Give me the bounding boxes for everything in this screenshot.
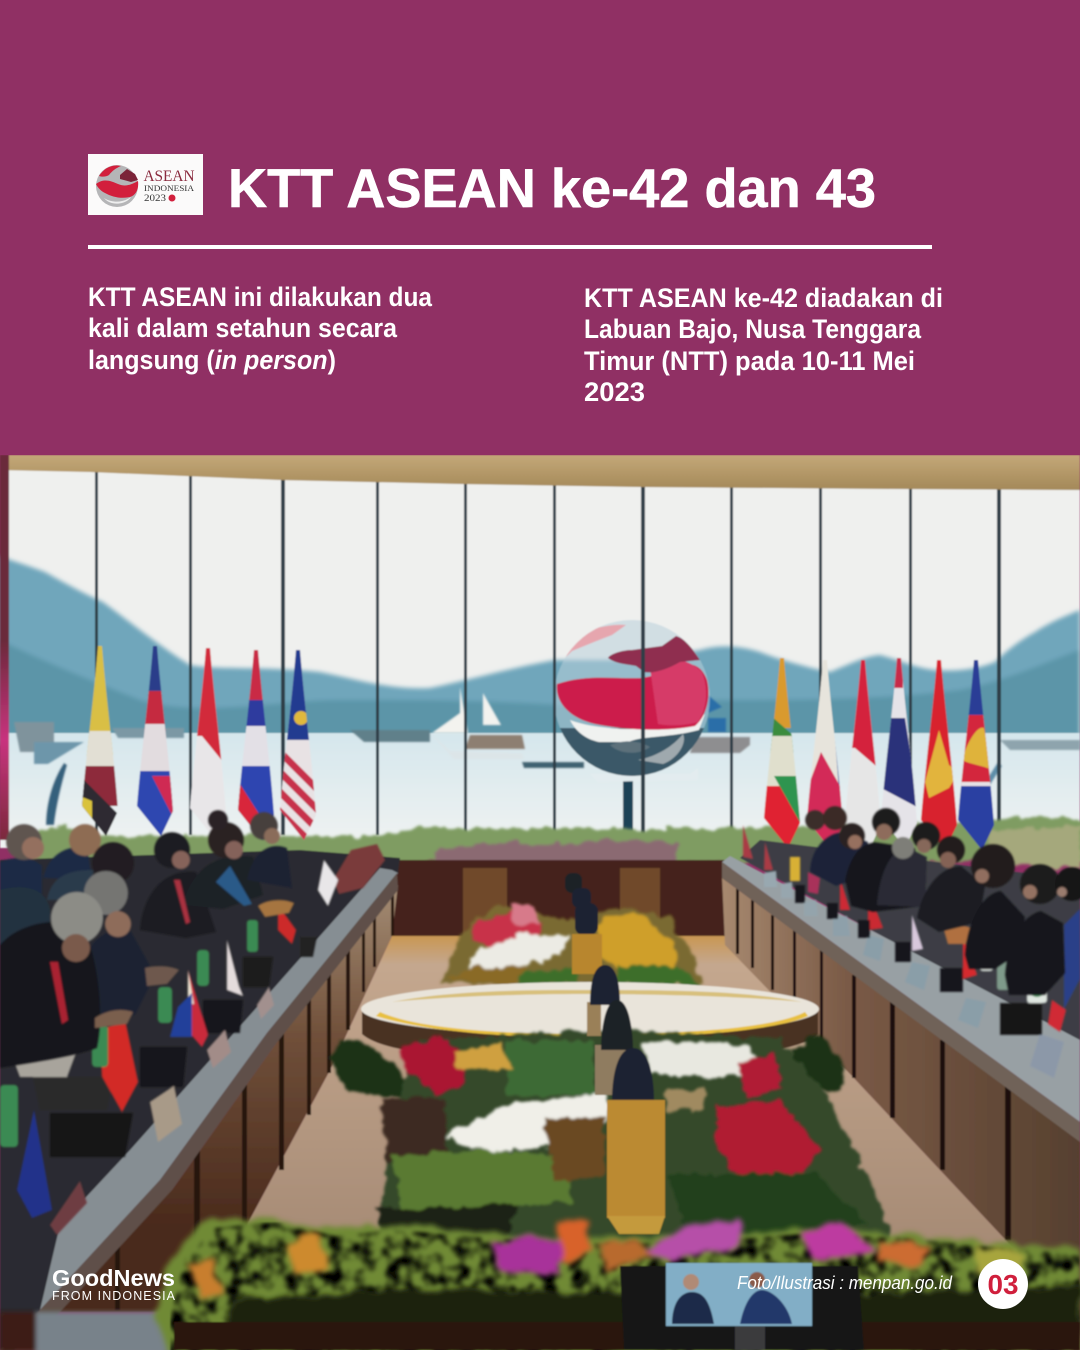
sea xyxy=(0,733,1080,848)
flag: Singapore xyxy=(846,659,879,846)
boats on water xyxy=(14,687,1080,825)
foreground flowers xyxy=(155,1216,1080,1350)
brand: GoodNews From Indonesia: GoodNews xyxy=(52,1265,175,1291)
flag: Thailand xyxy=(882,657,918,840)
left table wood panels xyxy=(40,885,398,1312)
title divider xyxy=(88,245,932,249)
wooden floor xyxy=(0,936,1080,1350)
text block: right column: 2023 xyxy=(584,377,645,407)
side plants xyxy=(330,1032,844,1098)
brand: GoodNews From Indonesia: FROM INDONESIA xyxy=(52,1289,176,1303)
text block: right column xyxy=(584,283,943,407)
delegates: left side xyxy=(0,810,294,1068)
flag: Brunei xyxy=(80,646,120,841)
center flower arrangement: front xyxy=(377,1030,889,1258)
brand: GoodNews From Indonesia xyxy=(52,1265,176,1303)
center flower arrangement: back xyxy=(440,905,702,985)
logo: ASEAN Indonesia 2023: ASEAN xyxy=(144,168,195,185)
page number badge: 03 xyxy=(988,1269,1018,1300)
back greenery xyxy=(30,818,1080,868)
table items: left xyxy=(0,844,385,1235)
page number badge xyxy=(978,1259,1028,1309)
right table surface xyxy=(722,840,1080,1142)
photo: summit meeting room xyxy=(0,455,1080,1350)
bottom edge xyxy=(174,1322,1080,1350)
text block: left column: KTT ASEAN ini dilakukan dua xyxy=(88,282,433,312)
text block: left column xyxy=(88,282,433,375)
table items: right xyxy=(743,825,1080,1078)
window mullions xyxy=(95,455,1001,835)
logo: ASEAN Indonesia 2023: 2023 xyxy=(144,193,167,203)
text block: left column: kali dalam setahun secara xyxy=(88,313,398,343)
text block: right column: Labuan Bajo, Nusa Tenggara xyxy=(584,314,922,344)
foreground monitor xyxy=(620,1263,864,1350)
flag: Philippines xyxy=(806,660,842,842)
globe sculpture xyxy=(550,620,716,836)
right table wood panels xyxy=(722,878,1080,1320)
logo: ASEAN Indonesia 2023: INDONESIA xyxy=(144,183,195,193)
background panel xyxy=(0,0,1080,455)
text block: left column: langsung (in person) xyxy=(88,345,336,375)
flag: Cambodia xyxy=(135,646,175,841)
flag: Myanmar xyxy=(762,658,802,853)
window view: sky xyxy=(8,469,1080,734)
flag: Vietnam xyxy=(920,659,958,843)
flag: Malaysia xyxy=(278,650,318,845)
delegates: right side xyxy=(805,806,1080,995)
ceiling band xyxy=(0,455,1080,490)
mountains xyxy=(0,556,1080,745)
bottom left corner xyxy=(0,1312,174,1350)
text block: right column: KTT ASEAN ke-42 diadakan di xyxy=(584,283,943,313)
title: KTT ASEAN ke-42 dan 43 xyxy=(228,157,876,219)
logo: ASEAN Indonesia 2023 xyxy=(88,154,203,215)
center round mirror table xyxy=(360,980,820,1050)
back wall behind tables xyxy=(392,860,727,942)
flag: Laos xyxy=(237,649,275,826)
flag: ASEAN xyxy=(956,660,996,856)
left table surface xyxy=(0,850,400,1350)
left pillar xyxy=(0,455,9,840)
photo credit: Foto/Ilustrasi : menpan.go.id xyxy=(737,1273,953,1293)
text block: right column: Timur (NTT) pada 10-11 Mei xyxy=(584,346,915,376)
center pedestals with cameras xyxy=(565,873,665,1234)
flag: Indonesia xyxy=(189,647,224,830)
